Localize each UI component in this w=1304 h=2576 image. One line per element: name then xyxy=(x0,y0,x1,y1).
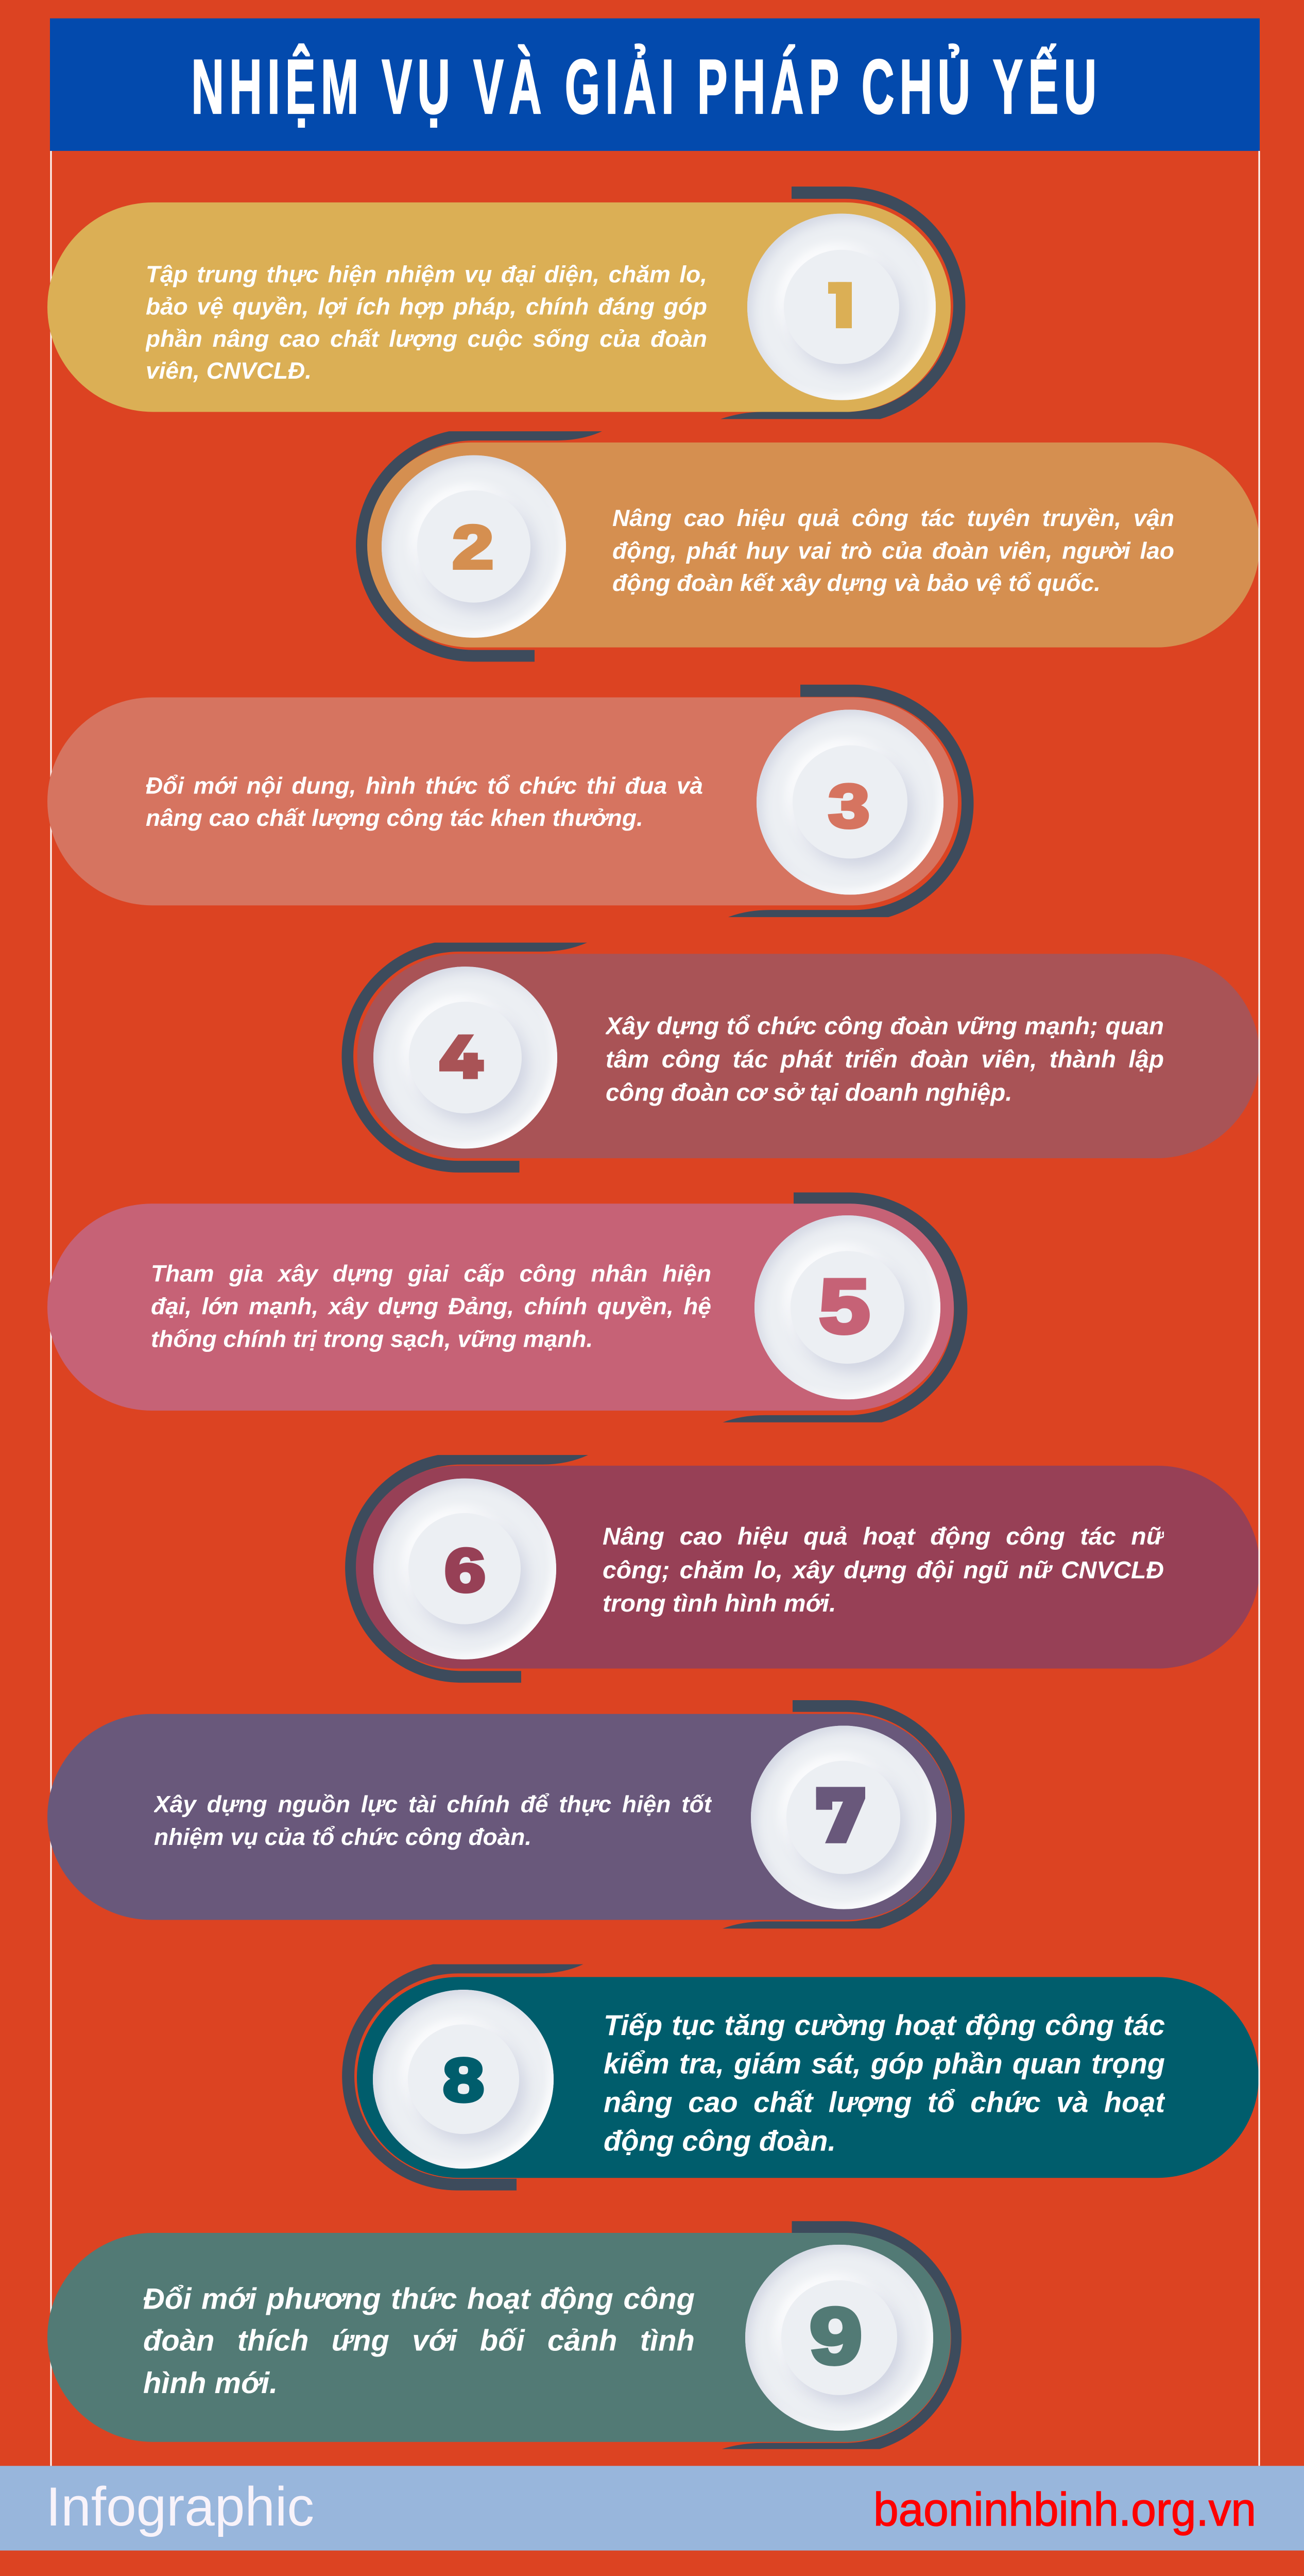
panel: step 6 xyxy=(345,1455,1260,1683)
number 8: 8 xyxy=(443,2046,484,2114)
text: step 7: Xây dựng nguồn lực tài chính để thực hiện tốt xyxy=(154,1791,712,1818)
plate: step 5 xyxy=(754,1215,940,1399)
text: step 8: nâng cao chất lượng tổ chức và hoạt xyxy=(604,2086,1165,2119)
text: step 3: nâng cao chất lượng công tác khen thưởng. xyxy=(146,804,643,831)
pill: step 4 xyxy=(357,954,1260,1158)
panel: step 2 xyxy=(356,431,1260,662)
text: step 6: công; chăm lo, xây dựng đội ngũ nữ CNVCLĐ xyxy=(603,1557,1164,1584)
number 1: 1 xyxy=(822,267,859,341)
number 5: 5 xyxy=(819,1263,870,1349)
plate: step 9 xyxy=(745,2245,933,2431)
text: step 6 xyxy=(603,1520,1164,1621)
footer label: Infographic xyxy=(46,2476,314,2537)
plate: step 2 xyxy=(382,455,566,638)
text: step 3 xyxy=(146,770,703,834)
text: step 6: Nâng cao hiệu quả hoạt động công tác nữ xyxy=(603,1523,1164,1550)
panel: step 5 xyxy=(47,1192,967,1422)
panel: step 1 xyxy=(47,187,965,419)
pill: step 9 xyxy=(47,2233,951,2442)
text: step 3: Đổi mới nội dung, hình thức tổ chức thi đua và xyxy=(146,772,703,799)
arc: step 5 xyxy=(723,1192,967,1422)
panel: step 7 xyxy=(47,1700,965,1928)
panel: step 8 xyxy=(342,1964,1259,2191)
panel: step 3 xyxy=(47,685,973,917)
pill: step 8 xyxy=(357,1977,1259,2178)
text: step 2: động đoàn kết xây dựng và bảo vệ tổ quốc. xyxy=(612,570,1101,596)
text: step 1 xyxy=(146,258,707,387)
plate: step 3 xyxy=(757,709,943,894)
text: step 9: đoàn thích ứng với bối cảnh tình xyxy=(143,2324,695,2358)
plate: step 6 xyxy=(373,1478,556,1659)
footer website: baoninhbinh.org.vn xyxy=(873,2483,1256,2536)
number 3: 3 xyxy=(828,772,870,840)
text: step 2: động, phát huy vai trò của đoàn viên, người lao xyxy=(612,537,1174,564)
number 9: 9 xyxy=(810,2291,862,2380)
pill: step 1 xyxy=(47,202,951,412)
text: step 9: hình mới. xyxy=(143,2366,278,2399)
text: step 5: Tham gia xây dựng giai cấp công nhân hiện xyxy=(151,1260,711,1287)
text: step 9: Đổi mới phương thức hoạt động công xyxy=(143,2282,695,2315)
text: step 8: động công đoàn. xyxy=(604,2125,836,2157)
plate: step 8 xyxy=(373,1990,554,2168)
text: step 5: thống chính trị trong sạch, vững mạnh. xyxy=(151,1326,593,1352)
pill: step 3 xyxy=(47,698,958,905)
number 7: 7 xyxy=(812,1772,869,1858)
pill: step 6 xyxy=(356,1466,1260,1669)
pill: step 5 xyxy=(47,1204,954,1411)
panel: step 9 xyxy=(47,2221,962,2449)
text: step 4: tâm công tác phát triển đoàn viên, thành lập xyxy=(606,1046,1164,1073)
text: step 4 xyxy=(606,1010,1164,1109)
pill: step 2 xyxy=(367,443,1260,648)
arc: step 8 xyxy=(342,1964,583,2191)
number 6: 6 xyxy=(444,1536,486,1604)
arc: step 4 xyxy=(341,943,587,1173)
panel: step 4 xyxy=(341,943,1260,1173)
text: step 2 xyxy=(612,502,1174,600)
text: step 1: phần nâng cao chất lượng cuộc sống của đoàn xyxy=(146,325,707,351)
text: step 4: Xây dựng tổ chức công đoàn vững mạnh; quan xyxy=(606,1013,1164,1040)
plate: step 4 xyxy=(373,967,557,1149)
text: step 4: công đoàn cơ sở tại doanh nghiệp. xyxy=(606,1079,1013,1106)
text: step 2: Nâng cao hiệu quả công tác tuyên truyền, vận xyxy=(612,505,1174,531)
text: step 1: Tập trung thực hiện nhiệm vụ đại diện, chăm lo, xyxy=(146,261,707,287)
arc: step 6 xyxy=(345,1455,588,1683)
number 2: 2 xyxy=(452,513,493,581)
text: step 7: nhiệm vụ của tổ chức công đoàn. xyxy=(154,1823,531,1850)
number 4: 4 xyxy=(443,1017,481,1091)
arc: step 3 xyxy=(728,685,973,917)
text: step 6: trong tình hình mới. xyxy=(603,1590,836,1617)
text: step 8 xyxy=(604,2006,1165,2160)
arc: step 7 xyxy=(723,1700,965,1928)
pill: step 7 xyxy=(47,1714,951,1920)
plate: step 7 xyxy=(751,1725,936,1909)
text: step 8: kiểm tra, giám sát, góp phần quan trọng xyxy=(604,2047,1165,2080)
arc: step 1 xyxy=(720,187,965,419)
text: step 8: Tiếp tục tăng cường hoạt động công tác xyxy=(604,2009,1165,2041)
plate: step 1 xyxy=(747,214,936,400)
text: step 5 xyxy=(151,1257,711,1355)
arc: step 9 xyxy=(722,2221,962,2449)
text: step 9 xyxy=(143,2278,695,2404)
text: step 1: bảo vệ quyền, lợi ích hợp pháp, chính đáng góp xyxy=(146,293,707,319)
text: step 5: đại, lớn mạnh, xây dựng Đảng, chính quyền, hệ xyxy=(151,1293,711,1319)
text: step 1: viên, CNVCLĐ. xyxy=(146,357,312,384)
arc: step 2 xyxy=(356,431,602,662)
text: step 7 xyxy=(154,1788,712,1853)
title banner xyxy=(50,19,1260,151)
footer bar xyxy=(0,2466,1304,2551)
